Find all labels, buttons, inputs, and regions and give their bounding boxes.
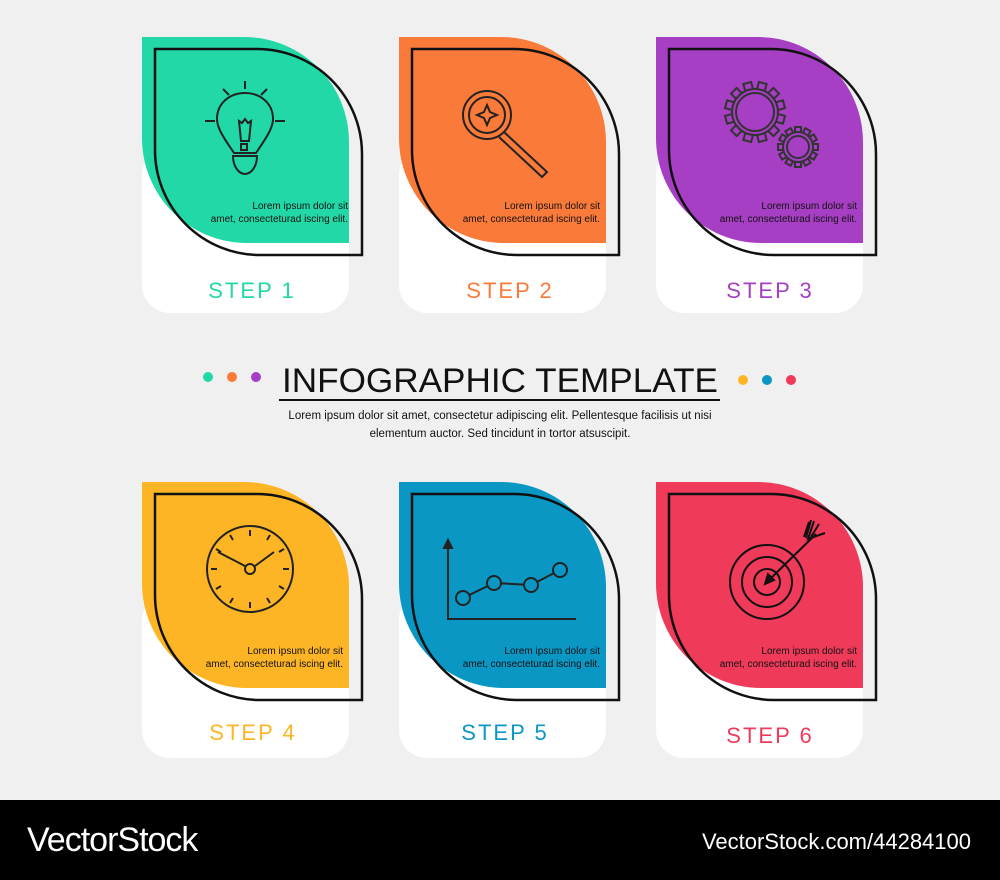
panel: step 3: amet, consecteturad iscing elit. <box>720 214 857 225</box>
heading: step 5: STEP 5 <box>461 720 549 745</box>
text block: Lorem ipsum dolor sit <box>247 646 343 657</box>
panel: step 1: amet, consecteturad iscing elit. <box>211 214 348 225</box>
text block: Lorem ipsum dolor sit <box>761 201 857 212</box>
panel: step 2: amet, consecteturad iscing elit. <box>463 214 600 225</box>
decoration: left dots <box>203 372 261 382</box>
panel: step 6 <box>656 482 876 758</box>
footer bar <box>0 800 1000 880</box>
decoration: right dots <box>738 375 796 385</box>
panel: step 1 <box>142 37 362 313</box>
icon: line chart <box>444 540 576 619</box>
text block: Lorem ipsum dolor sit <box>761 646 857 657</box>
panel: step 6: amet, consecteturad iscing elit. <box>720 659 857 670</box>
heading: step 2: STEP 2 <box>466 278 554 303</box>
icon: magnifier <box>463 91 547 177</box>
heading: step 4: STEP 4 <box>209 720 297 745</box>
panel: step 3 <box>656 37 876 313</box>
text block: Lorem ipsum dolor sit <box>252 201 348 212</box>
panel: step 2 <box>399 37 619 313</box>
panel: step 5 <box>399 482 619 758</box>
panel: step 5: amet, consecteturad iscing elit. <box>463 659 600 670</box>
icon: clock <box>207 526 293 612</box>
icon: target <box>730 520 825 619</box>
text block: Lorem ipsum dolor sit <box>504 646 600 657</box>
icon: light bulb <box>205 81 285 174</box>
heading: step 1: STEP 1 <box>208 278 296 303</box>
title: INFOGRAPHIC TEMPLATE <box>282 362 718 400</box>
subtitle text <box>288 410 712 440</box>
subtitle text: Lorem ipsum dolor sit amet, consectetur adipiscing elit. Pellentesque facilisis ut nisi <box>288 410 712 422</box>
subtitle text: elementum auctor. Sed tincidunt in tortor atsuscipit. <box>370 428 630 440</box>
footer bar: VectorStock <box>27 821 199 859</box>
footer bar: VectorStock.com/44284100 <box>702 829 971 854</box>
icon: gears <box>725 82 818 167</box>
text block: Lorem ipsum dolor sit <box>504 201 600 212</box>
heading: step 3: STEP 3 <box>726 278 814 303</box>
panel: step 4 <box>142 482 362 758</box>
panel: step 4: amet, consecteturad iscing elit. <box>206 659 343 670</box>
heading: step 6: STEP 6 <box>726 723 814 748</box>
